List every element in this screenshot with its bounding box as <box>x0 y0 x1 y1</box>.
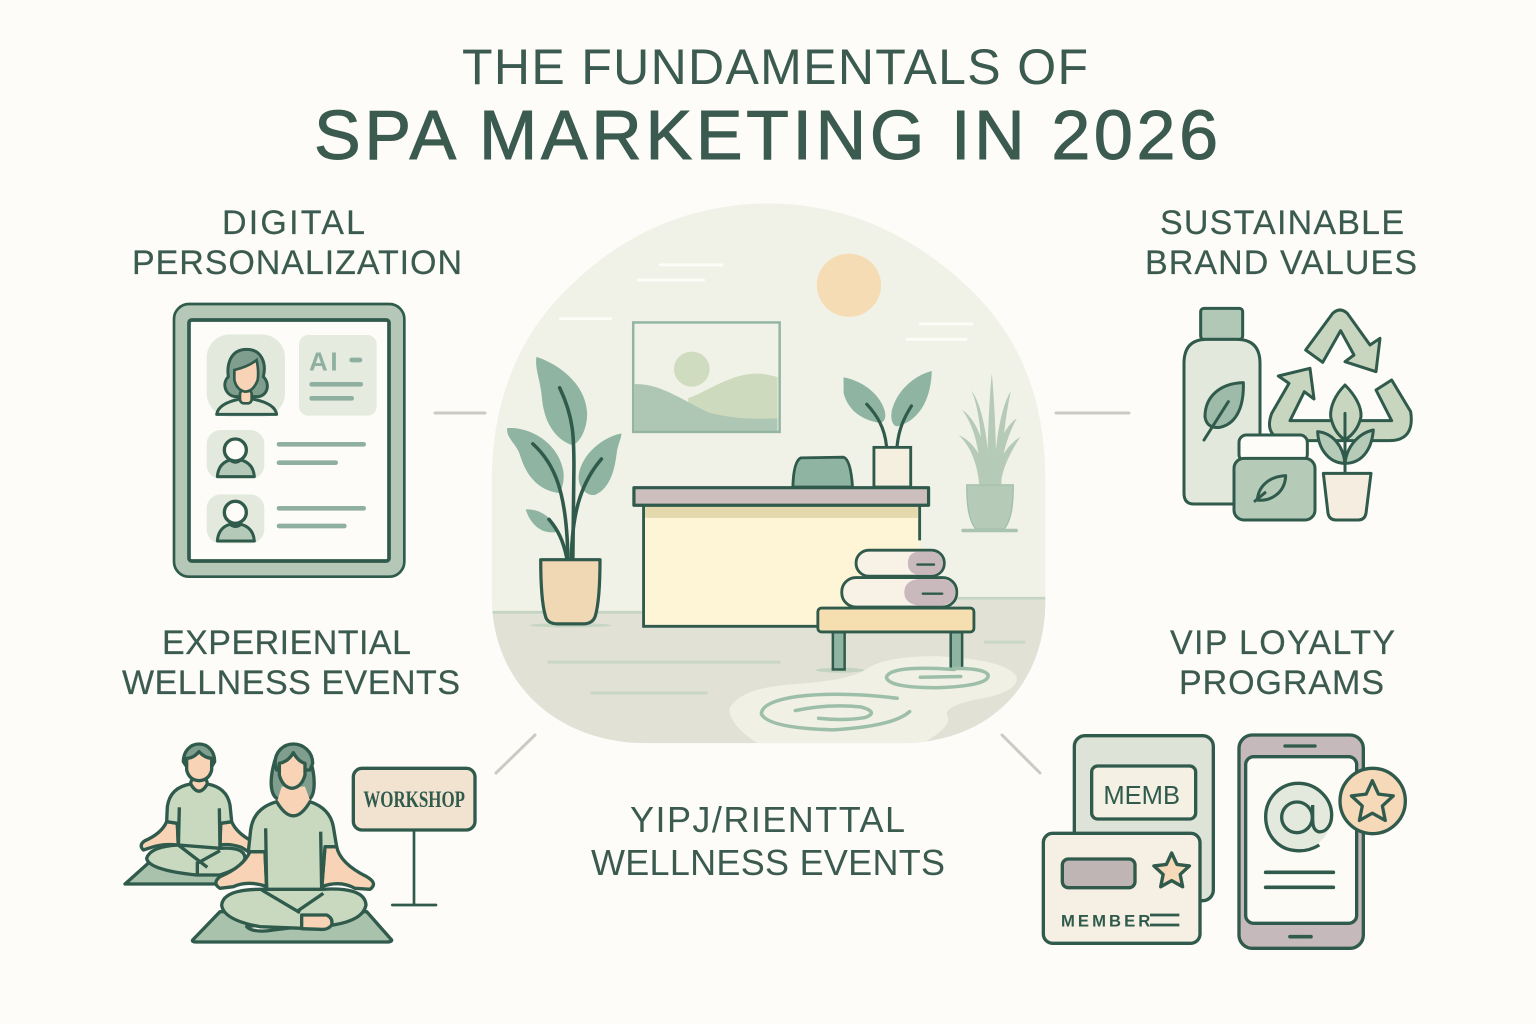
man on mat <box>125 744 253 884</box>
back membership card <box>1074 736 1213 901</box>
heading: VIP loyalty programs: VIP LOYALTY <box>1170 624 1395 662</box>
recycling arrows <box>1269 310 1411 441</box>
title line 1: THE FUNDAMENTALS OF <box>462 39 1088 95</box>
central spa scene <box>490 204 1047 746</box>
floor and rug <box>490 598 1047 746</box>
woman on mat <box>192 744 392 942</box>
potted seedling <box>1318 385 1373 520</box>
heading: sustainable brand values <box>1145 204 1417 282</box>
tablet screen <box>189 320 389 561</box>
icon: personalization tablet <box>174 304 404 577</box>
heading: digital personalization: PERSONALIZATION <box>132 244 462 282</box>
list row 1 <box>207 430 364 479</box>
heading: VIP loyalty programs <box>1170 624 1395 702</box>
wall highlights <box>560 265 972 339</box>
heading: digital personalization: DIGITAL <box>222 204 365 242</box>
heading: center bottom wellness events: YIPJ/RIENTTAL <box>630 799 905 840</box>
workshop sign <box>353 768 475 905</box>
connector lines <box>435 413 1129 773</box>
AI tile <box>299 335 377 416</box>
front membership card: MEMBER <box>1061 912 1150 931</box>
front membership card <box>1043 833 1200 943</box>
text lines on phone <box>1266 872 1333 887</box>
icon: loyalty cards and phone <box>1043 735 1405 948</box>
icon: wellness event people <box>125 744 475 942</box>
desk plant <box>844 371 932 487</box>
framed picture <box>633 322 780 432</box>
title <box>314 39 1218 174</box>
heading: center bottom wellness events <box>591 799 945 883</box>
heading: sustainable brand values: SUSTAINABLE <box>1160 204 1404 242</box>
star badge <box>1340 768 1405 834</box>
workshop sign: WORKSHOP <box>363 787 465 813</box>
bench <box>816 608 974 673</box>
jar <box>1234 435 1315 520</box>
heading: sustainable brand values: BRAND VALUES <box>1145 244 1417 282</box>
title line 2: SPA MARKETING IN 2026 <box>314 96 1218 174</box>
phone <box>1239 735 1363 948</box>
heading: VIP loyalty programs: PROGRAMS <box>1179 664 1384 702</box>
sun <box>817 254 881 317</box>
heading: experiential wellness events <box>122 624 460 702</box>
heading: digital personalization <box>132 204 462 282</box>
pale wall plant <box>959 374 1020 532</box>
bottle <box>1184 308 1260 504</box>
reception desk <box>634 457 929 626</box>
back membership card: MEMB <box>1103 780 1180 810</box>
heading: center bottom wellness events: WELLNESS EVENTS <box>591 842 945 883</box>
heading: experiential wellness events: EXPERIENTIAL <box>162 624 411 662</box>
large potted plant <box>507 357 621 627</box>
tablet frame <box>174 304 404 577</box>
AI tile: AI <box>309 346 338 376</box>
at sign <box>1266 783 1332 851</box>
heading: experiential wellness events: WELLNESS EVENTS <box>122 664 460 702</box>
profile avatar woman <box>207 334 285 417</box>
rug spirals <box>761 668 988 730</box>
scene background <box>492 204 1045 743</box>
list row 2 <box>207 494 364 543</box>
towels <box>842 550 957 607</box>
icon: sustainable products <box>1184 308 1411 520</box>
